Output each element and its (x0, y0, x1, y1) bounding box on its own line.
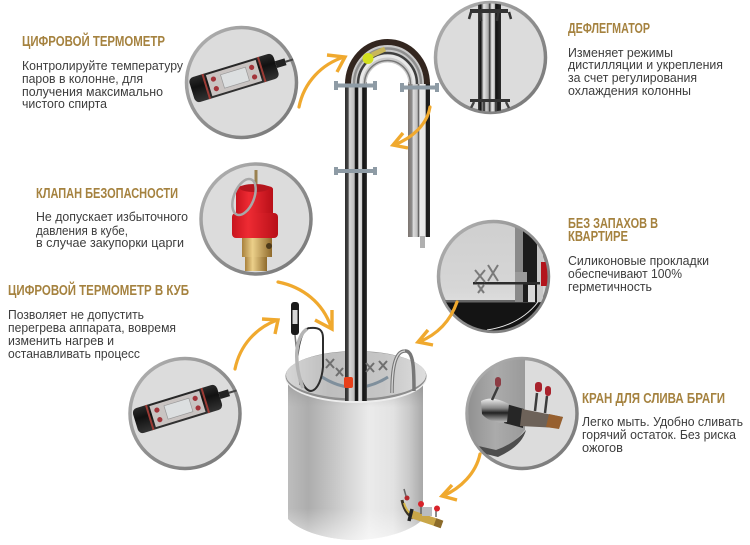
callout circle: drain tap (466, 357, 577, 468)
callout circle: dephlegmator (436, 0, 546, 115)
text block: digital thermometer (22, 32, 184, 111)
text block: safety valve: давления в кубе, (36, 224, 128, 238)
callout circle: boiler thermometer (130, 358, 241, 468)
callout circle: column thermometer (186, 28, 297, 138)
text block: boiler thermometer: изменить нагрев и (8, 334, 114, 348)
text block: digital thermometer: чистого спирта (22, 97, 107, 111)
text block: no odours: обеспечивают 100% (568, 267, 682, 281)
text block: drain tap: горячий остаток. Без риска (582, 428, 736, 442)
dephlegmator picture (469, 0, 511, 115)
arrow: boiler thermometer (235, 319, 278, 369)
text block: digital thermometer: Контролируйте температуру (22, 59, 184, 73)
text block: boiler thermometer: перегрева аппарата, вовремя (8, 321, 176, 335)
text block: no odours (568, 216, 709, 294)
text block: safety valve: КЛАПАН БЕЗОПАСНОСТИ (36, 186, 178, 202)
text block: safety valve: Не допускает избыточного (36, 210, 188, 224)
text block: digital thermometer: получения максимально (22, 85, 163, 99)
arrow: valve to boiler (278, 282, 332, 329)
thermometer on boiler (291, 302, 300, 385)
arrow: thermometer to column (299, 55, 345, 107)
text block: no odours: герметичность (568, 280, 652, 294)
left handle (297, 328, 323, 391)
red fitting (344, 377, 353, 388)
column and reflux tube (345, 42, 430, 400)
text block: dephlegmator (568, 21, 723, 98)
text block: dephlegmator: ДЕФЛЕГМАТОР (568, 21, 650, 37)
text block: safety valve (36, 186, 188, 250)
text block: boiler thermometer (8, 281, 189, 361)
text block: no odours: БЕЗ ЗАПАХОВ В (568, 216, 658, 232)
callout circle: sealed lid (435, 220, 555, 337)
apparatus: still with column (285, 42, 442, 540)
tap picture (466, 357, 563, 457)
thermometer picture (188, 47, 297, 103)
text block: safety valve: в случае закупорки царги (36, 236, 184, 250)
text block: dephlegmator: за счет регулирования (568, 71, 697, 85)
arrow: seal to lid (418, 302, 457, 345)
clamps (334, 81, 439, 175)
callout circle: safety valve (201, 164, 311, 274)
text block: drain tap (582, 391, 743, 455)
text block: dephlegmator: Изменяет режимы (568, 46, 673, 60)
right handle (392, 351, 414, 393)
thermometer picture (132, 378, 241, 434)
text block: digital thermometer: ЦИФРОВОЙ ТЕРМОМЕТР (22, 32, 165, 50)
text block: boiler thermometer: останавливать процесс (8, 347, 140, 361)
drain tap (402, 489, 442, 524)
text block: digital thermometer: паров в колонне, для (22, 72, 143, 86)
arrow: dephlegmator to tube (393, 107, 430, 148)
valve picture (228, 170, 278, 271)
text block: dephlegmator: охлаждения колонны (568, 84, 691, 98)
text block: dephlegmator: дистилляции и укрепления (568, 58, 723, 72)
column over flange (345, 380, 367, 401)
text block: drain tap: Легко мыть. Удобно сливать (582, 415, 743, 429)
text block: boiler thermometer: Позволяет не допустить (8, 308, 144, 322)
text block: boiler thermometer: ЦИФРОВОЙ ТЕРМОМЕТР В КУБ (8, 281, 189, 299)
text block: no odours: Силиконовые прокладки (568, 254, 709, 268)
text block: drain tap: ожогов (582, 441, 623, 455)
arrow: tap callout to tap (442, 454, 480, 500)
text block: no odours: КВАРТИРЕ (568, 229, 628, 245)
flange on lid (322, 359, 388, 388)
boiler body (285, 351, 427, 540)
seal picture (445, 227, 548, 330)
